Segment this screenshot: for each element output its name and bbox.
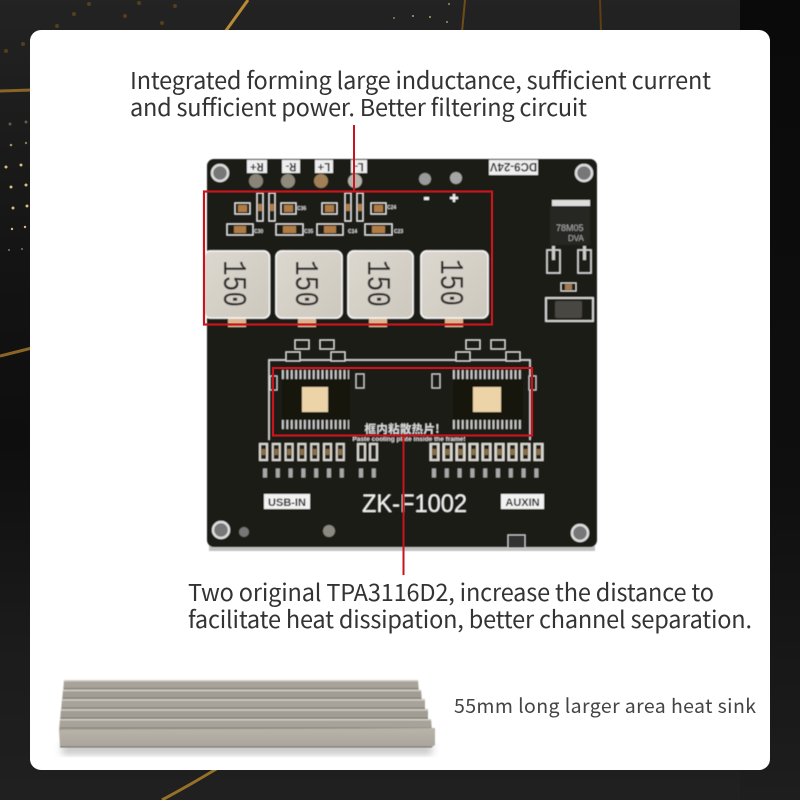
inductors 150: 150 xyxy=(214,260,251,307)
caption: inductance: Integrated forming large inductance, sufficient current xyxy=(130,62,711,96)
small capacitors xyxy=(227,193,392,235)
capacitor silk labels: C30 xyxy=(254,229,263,235)
red highlight box: inductors xyxy=(204,192,492,324)
terminal pads xyxy=(249,172,462,188)
capacitor silk labels: C24 xyxy=(387,205,396,211)
terminal labels xyxy=(247,159,367,175)
circuit board photo xyxy=(204,159,597,551)
IC frame silk xyxy=(269,360,530,440)
capacitor silk labels: C36 xyxy=(297,206,306,212)
side components xyxy=(270,374,536,390)
board body xyxy=(207,159,597,547)
heat sink instructions xyxy=(352,421,466,443)
heat sink instructions: 框内粘散热片! xyxy=(364,421,440,437)
heat sink instructions: Paste cooling plate inside the frame! xyxy=(352,436,466,443)
model name: ZK-F1002 xyxy=(362,490,467,518)
voltage regulator: DVA xyxy=(568,234,585,243)
AUXIN label xyxy=(501,494,544,509)
caption: amplifier chips xyxy=(188,574,752,635)
board shadow xyxy=(209,545,595,551)
bottom connector xyxy=(239,525,525,548)
inductors 150: 150 xyxy=(431,259,468,306)
mounting holes xyxy=(212,165,592,541)
caption: amplifier chips: facilitate heat dissipation, better channel separation. xyxy=(188,601,752,635)
power polarity marks xyxy=(424,194,458,202)
caption: inductance xyxy=(130,62,711,123)
USB-IN label: USB-IN xyxy=(268,497,306,509)
upper amp capacitors xyxy=(286,340,520,361)
voltage regulator: 78M05 xyxy=(556,223,584,233)
inductor pads xyxy=(228,318,463,327)
terminal labels: R- xyxy=(285,159,297,175)
power capacitor C4 xyxy=(546,283,593,321)
inductors 150: 150 xyxy=(286,260,323,307)
AUXIN label: AUXIN xyxy=(505,497,540,509)
amplifier chip left xyxy=(282,374,350,424)
red highlight box: amplifier chips xyxy=(273,368,532,436)
voltage regulator xyxy=(547,200,591,273)
passive component rows xyxy=(259,452,544,473)
capacitor silk labels: C23 xyxy=(394,229,403,235)
caption: heat sink: 55mm long larger area heat sink xyxy=(454,690,756,719)
voltage label: DC9-24V xyxy=(490,160,537,172)
amplifier chip right xyxy=(453,374,523,424)
terminal labels: L- xyxy=(354,159,364,175)
red leader line: inductors xyxy=(353,125,355,191)
heat sink photo xyxy=(59,680,435,754)
capacitor silk labels xyxy=(254,205,403,235)
terminal labels: R+ xyxy=(249,159,264,175)
capacitor silk labels: C14 xyxy=(348,229,357,235)
caption: inductance: and sufficient power. Better filtering circuit xyxy=(130,89,587,123)
inductors 150 xyxy=(204,251,488,318)
caption: amplifier chips: Two original TPA3116D2, increase the distance to xyxy=(188,574,714,608)
terminal labels: L+ xyxy=(317,159,330,175)
inductors 150: 150 xyxy=(358,260,395,307)
capacitor silk labels: C35 xyxy=(304,229,313,235)
red leader line: amplifier chips xyxy=(402,436,404,575)
USB-IN label xyxy=(264,494,310,509)
heat sink shadow xyxy=(62,745,432,754)
